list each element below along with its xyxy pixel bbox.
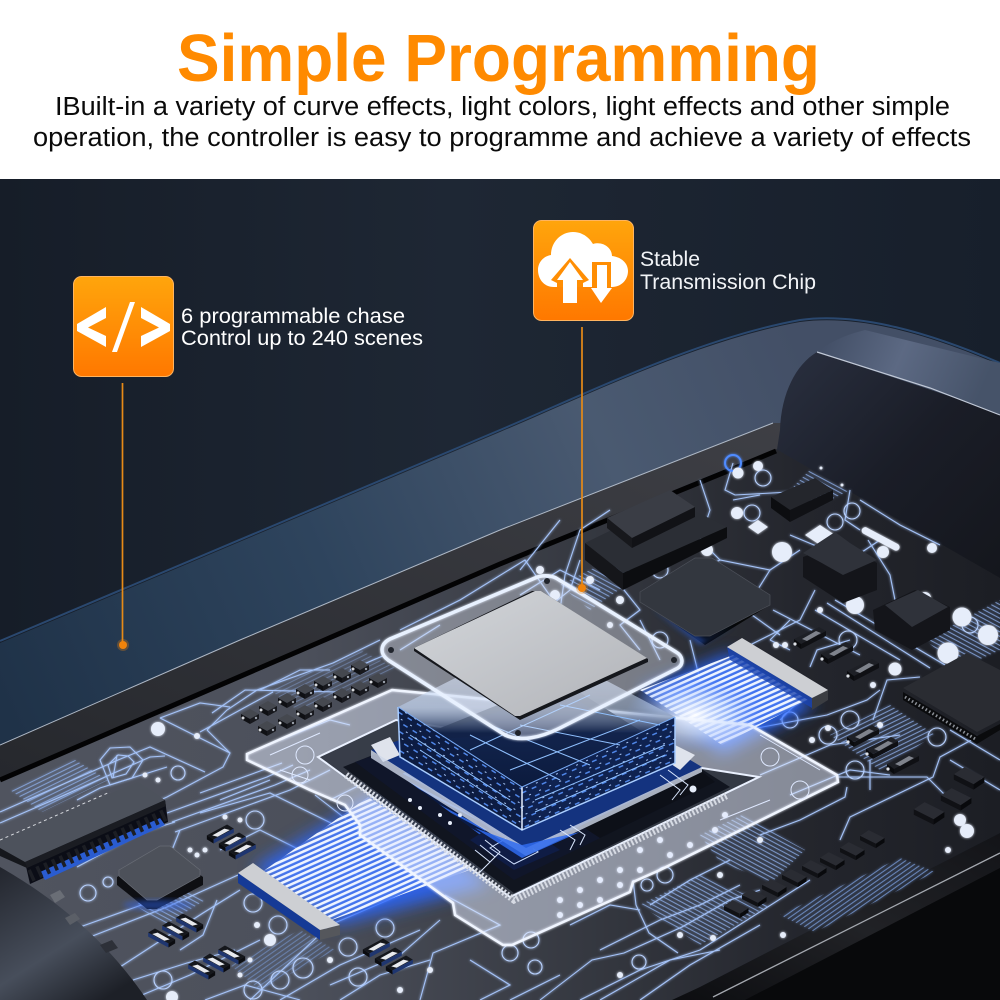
description text (33, 93, 971, 152)
frame dark band (0, 423, 785, 780)
right IC chip (903, 653, 1000, 744)
board front face (672, 833, 1000, 1000)
circuit traces (0, 455, 1000, 1000)
glass circuit panel (247, 677, 838, 945)
white glare right of chip (625, 677, 765, 753)
left octagon chip (117, 846, 203, 910)
ribbon glow (253, 653, 815, 925)
icon: cloud transfer (534, 220, 634, 320)
left ribbon cable (262, 797, 475, 920)
circuit board surface (0, 449, 1000, 1000)
label: programmable chase: Control up to 240 scenes (181, 327, 423, 350)
description text: IBuilt-in a variety of curve effects, light colors, light effects and other simple (55, 93, 950, 121)
trace fan under cube (475, 770, 688, 872)
left connector bar (238, 863, 340, 940)
orange marker: left (117, 383, 129, 651)
chip package with pins (343, 680, 730, 900)
handle band highlight (817, 352, 1000, 415)
board front highlight line (713, 853, 1000, 997)
label: programmable chase (181, 305, 423, 350)
frame bright line (0, 423, 773, 745)
board rear shadow (0, 451, 776, 780)
label: transmission chip: Transmission Chip (640, 271, 816, 294)
orange marker: right (576, 327, 588, 594)
label: transmission chip (640, 248, 816, 294)
main chip stack (343, 576, 730, 900)
trace bundles (10, 470, 1000, 990)
top connector (771, 478, 833, 522)
right handle top band (817, 330, 1000, 415)
small pads beside left handle (50, 890, 118, 953)
capacitor grid (241, 660, 387, 736)
right small parts (724, 627, 984, 918)
device frame bar (0, 320, 1000, 790)
glass cube (398, 640, 675, 858)
left IC chip (0, 782, 168, 884)
right handle (776, 352, 1000, 590)
right dark blocks (803, 532, 950, 650)
board front black lower (745, 868, 1000, 1000)
left handle (0, 867, 147, 1000)
frame outer edge highlight (0, 318, 1000, 641)
panel inner traces (270, 733, 820, 820)
square chip (640, 558, 770, 645)
description text: operation, the controller is easy to programme and achieve a variety of effects (33, 124, 971, 152)
top plate with glowing frame (382, 576, 682, 739)
right connector bar (727, 638, 828, 710)
title: Simple Programming (177, 21, 820, 96)
mid substrate (371, 730, 702, 856)
icon: code brackets (74, 276, 174, 376)
label: transmission chip: Stable (640, 248, 700, 271)
silver top plate (414, 591, 648, 720)
small component groups left (148, 825, 413, 979)
top-right switch component (585, 490, 727, 590)
label: programmable chase: 6 programmable chase (181, 305, 405, 328)
right ribbon cable (640, 655, 808, 745)
